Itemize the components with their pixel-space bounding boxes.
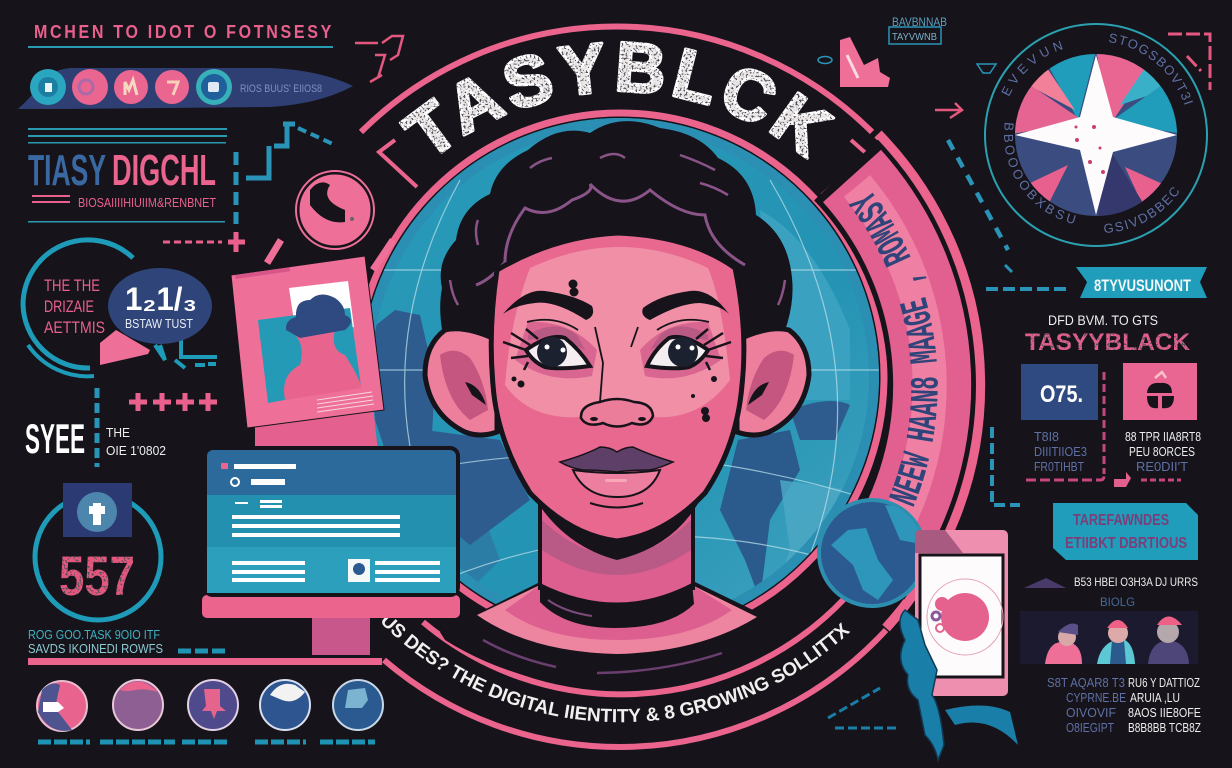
- monitor: [202, 448, 460, 655]
- ears: [425, 329, 809, 435]
- callout: circular stat: BSTAW TUST: [125, 316, 193, 331]
- panel: right stats: TASYYBLACK: [1025, 329, 1191, 356]
- callout box: ETIIBKT DBRTIOUS: [1065, 535, 1187, 552]
- text: stat caption: [28, 627, 229, 656]
- hair: [440, 121, 793, 365]
- lips: [573, 470, 660, 497]
- dashed teal arc: [948, 34, 1210, 289]
- text: bottom right: OIVOVIF: [1066, 705, 1116, 720]
- panel: right stats: [992, 267, 1207, 505]
- eye shadow: [515, 322, 721, 378]
- shirt: [440, 582, 790, 687]
- panel: right stats: DIIITIIOE3: [1034, 444, 1087, 459]
- compass dial: [984, 23, 1208, 247]
- text: syee: [25, 388, 166, 467]
- panel: right arc band: [814, 130, 986, 632]
- text: syee: OIE 1'0802: [106, 443, 166, 458]
- text: bottom right: 8AOS IIE8OFE: [1128, 705, 1201, 720]
- icon row: [28, 658, 383, 742]
- compass dial: GSIVDBBEC: [1104, 187, 1179, 233]
- text: stat caption: ROG GOO.TASK 9OIO ITF: [28, 627, 160, 642]
- compass dial: STOGSBOVT3I: [1109, 34, 1193, 104]
- icon box: [1123, 363, 1197, 420]
- left eye: [503, 329, 590, 370]
- bottom curved tagline: US DES? THE DIGITAL IIENTITY & 8 GROWING SOLLITTX: [382, 618, 850, 722]
- globe: [369, 110, 888, 610]
- heading: top left: MCHEN TO IDOT O FOTNSESY: [34, 22, 334, 42]
- panel: right stats: FR0TIHBT: [1034, 459, 1084, 474]
- top marks: [355, 36, 962, 118]
- panel: right stats: DFD BVM. TO GTS: [1048, 312, 1158, 328]
- compass dial: BBOOOOBXBSU: [1004, 122, 1076, 224]
- icon strip: [18, 68, 353, 109]
- top right label: [889, 15, 996, 73]
- nose: [581, 399, 653, 426]
- text: syee: SYEE: [25, 415, 85, 462]
- choker: [540, 583, 694, 628]
- panel: brand block: [28, 128, 227, 222]
- panel: brand block: DIGCHL: [112, 146, 216, 195]
- photo card: [231, 256, 384, 452]
- callout: circular stat: DRIZAIE: [44, 297, 94, 316]
- stat ring: 557: [35, 483, 161, 620]
- top right label: BAVBNNAB: [892, 15, 947, 29]
- neck: [540, 490, 693, 595]
- icon strip: RIOS BUUS' EIIOS8: [240, 83, 322, 95]
- outer ring arcs: [361, 26, 886, 747]
- text: bottom right: S8T AQAR8 T3: [1047, 675, 1125, 690]
- text: bottom right: RU6 Y DATTIOZ: [1128, 675, 1200, 690]
- callout: circular stat: AETTMIS: [44, 318, 105, 337]
- text: bottom right: O8IEGIPT: [1066, 720, 1114, 735]
- text: stat caption: SAVDS IKOINEDI ROWFS: [28, 641, 163, 656]
- panel: right stats: T8I8: [1034, 429, 1059, 444]
- panel: people: [1020, 575, 1198, 664]
- phone in hand: [828, 530, 1018, 760]
- text: bottom right: [1047, 675, 1201, 735]
- panel: right stats: 88 TPR IIA8RT8: [1125, 429, 1201, 444]
- chest: [477, 585, 757, 654]
- panel: right stats: PEU 8ORCES: [1129, 444, 1195, 459]
- panel: brand block: BIOSAIIIIHIUIIM&RENBNET: [78, 195, 216, 210]
- banner: 8TYVUSUNONT: [1094, 276, 1191, 295]
- panel: people: B53 HBEI O3H3A DJ URRS: [1074, 575, 1198, 589]
- plus row: [129, 393, 217, 411]
- callout: circular stat: THE THE: [44, 276, 100, 295]
- callout: circular stat: 1₂1/₃: [125, 281, 197, 317]
- icon: lens: [267, 171, 393, 270]
- panel: right stats: RE0DII'T: [1136, 459, 1188, 474]
- face highlight: [505, 247, 730, 417]
- compass dial: EVEVUN: [1001, 40, 1062, 96]
- panel: brand block: TIASY: [28, 146, 106, 195]
- stat box: O75.: [1040, 381, 1083, 408]
- chin shadow: [530, 490, 705, 560]
- face: [491, 233, 744, 541]
- right eye: [647, 329, 731, 370]
- eyebrows: [503, 291, 729, 320]
- banner: [1076, 267, 1207, 298]
- callout box: TAREFAWNDES: [1073, 512, 1169, 529]
- callout box: [1053, 503, 1198, 560]
- text: syee: THE: [106, 425, 130, 440]
- text: bottom right: CYPRNE.BE: [1066, 690, 1126, 705]
- icon: corner arrow: [818, 37, 890, 87]
- panel: people: BIOLG: [1100, 595, 1135, 609]
- small globe: [819, 500, 925, 606]
- title: TASYBLCK: [398, 40, 836, 160]
- panel: right arc band: NEEW HAAN8 MAAGE , ROMASY: [848, 192, 938, 507]
- portrait: [425, 121, 809, 687]
- stat ring: 557: 557: [59, 544, 135, 607]
- stat box: [1021, 364, 1098, 420]
- text: bottom right: B8B8BB TCB8Z: [1128, 720, 1201, 735]
- text: bottom right: ARUIA ,LU: [1130, 690, 1180, 705]
- callout: circular stat: [23, 240, 217, 376]
- beauty marks: [512, 280, 717, 422]
- dashed connector: [163, 124, 335, 252]
- top right label: TAYVWNB: [892, 32, 937, 43]
